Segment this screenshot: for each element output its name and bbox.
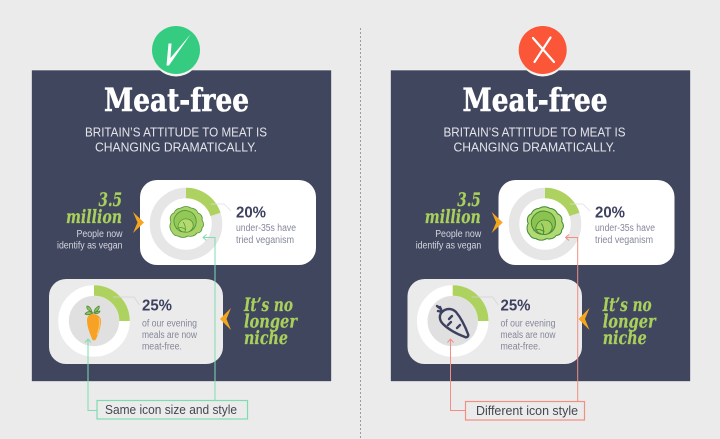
stat text: 25%: meals are now (142, 330, 198, 341)
heading: Meat-free (104, 81, 249, 119)
arrow: orange chevron right (133, 212, 144, 233)
stat: 3.5 million: People now (76, 229, 123, 240)
callout heading: no longer niche (243, 295, 298, 349)
stat: 3.5 million: People now (435, 229, 482, 240)
subheading: BRITAIN’S ATTITUDE TO MEAT IS (85, 126, 267, 140)
donut chart 25% (422, 290, 483, 352)
stat text: 20%: tried veganism (236, 235, 294, 246)
panel: correct example (32, 70, 332, 382)
stat text: 20%: 20% (236, 204, 266, 222)
callout heading: no longer niche: longer (244, 312, 298, 332)
stat: 3.5 million: million (66, 207, 122, 228)
subheading: CHANGING DRAMATICALLY. (95, 140, 257, 154)
stat: 3.5 million: identify as vegan (416, 240, 481, 252)
panel background (32, 70, 332, 382)
stat: 3.5 million (57, 190, 123, 252)
callout heading: no longer niche: It’s no (243, 295, 293, 316)
panel background (390, 70, 690, 382)
stat text: 20% (595, 204, 655, 246)
card: 25 percent (408, 279, 582, 364)
stat: 3.5 million: 3.5 (457, 190, 481, 211)
donut chart 20% (514, 193, 576, 255)
stat text: 25%: 25% (500, 298, 531, 314)
stat: 3.5 million: 3.5 (98, 190, 122, 211)
stat text: 20% (236, 204, 296, 246)
subheading: BRITAIN’S ATTITUDE TO MEAT IS (444, 126, 626, 140)
stat text: 25%: 25% (142, 298, 172, 314)
stat text: 25%: meat-free. (142, 342, 182, 352)
icon: green check badge (152, 26, 200, 76)
subheading (85, 126, 267, 154)
panel: incorrect example (390, 70, 690, 382)
donut chart 20% (155, 193, 217, 255)
stat: 3.5 million (416, 190, 482, 252)
stat text: 20%: under-35s have (595, 223, 655, 234)
callout: different icon style: Different icon style (476, 404, 578, 418)
heading: Meat-free (462, 81, 608, 119)
callout heading: no longer niche: niche (244, 328, 288, 349)
icon: red cross badge (519, 26, 567, 76)
subheading: CHANGING DRAMATICALLY. (454, 140, 616, 154)
card: 25 percent (49, 279, 223, 364)
icon: carrot (85, 306, 101, 340)
stat text: 20%: under-35s have (236, 223, 296, 234)
stat: 3.5 million: million (425, 207, 481, 228)
callout heading: no longer niche: It’s no (602, 295, 652, 316)
callout: same icon size and style: Same icon size and style (105, 403, 237, 417)
callout heading: no longer niche (602, 295, 657, 349)
card: 20 percent (498, 180, 674, 265)
donut chart 25% (64, 290, 124, 352)
stat text: 25%: meat-free. (500, 342, 540, 352)
stat text: 20%: tried veganism (595, 235, 653, 246)
arrow: orange chevron left (220, 308, 231, 330)
stat text: 25% (500, 298, 556, 352)
stat: 3.5 million: identify as vegan (57, 240, 122, 252)
stat text: 25%: of our evening (500, 318, 556, 330)
card: 20 percent (140, 180, 316, 265)
stat text: 25%: of our evening (142, 318, 197, 330)
icon: lettuce, larger (527, 207, 563, 240)
arrow: orange chevron left (578, 308, 590, 330)
arrow: orange chevron right (492, 212, 503, 233)
callout heading: no longer niche: longer (603, 312, 657, 332)
stat text: 25%: meals are now (500, 330, 556, 341)
stat text: 20%: 20% (595, 204, 625, 222)
callout: same icon size and style (85, 234, 248, 419)
callout: different icon style (448, 234, 584, 420)
callout heading: no longer niche: niche (603, 328, 647, 349)
subheading (444, 126, 626, 154)
icon: navy outline carrot (437, 306, 468, 337)
stat text: 25% (142, 298, 198, 352)
icon: lettuce (170, 206, 204, 238)
